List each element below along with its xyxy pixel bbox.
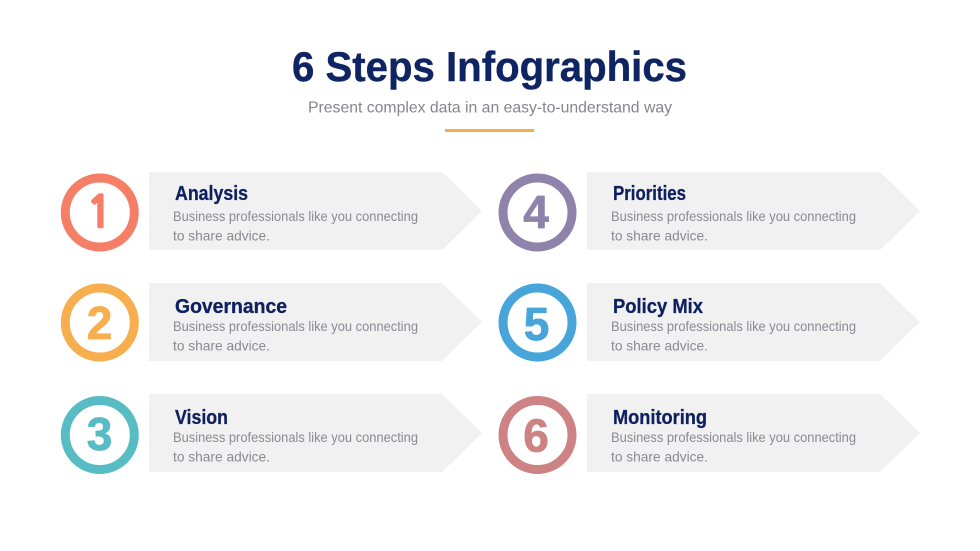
number badge 4 [503, 178, 572, 247]
description 5: to share advice. [611, 338, 708, 354]
heading 1: Analysis [175, 183, 248, 205]
title: 6 Steps Infographics [292, 43, 687, 90]
description 1: to share advice. [173, 228, 270, 244]
heading 6: Monitoring [613, 407, 707, 429]
heading 2: Governance [175, 296, 287, 318]
description 3: to share advice. [173, 448, 270, 464]
step 1: Analysis [65, 172, 482, 250]
heading 4: Priorities [613, 183, 686, 205]
arrow panel 4 [587, 172, 920, 250]
number badge 6: 6 [523, 410, 549, 462]
description 2: Business professionals like you connecting [173, 318, 418, 334]
number badge 1 [65, 178, 134, 247]
description 3: Business professionals like you connecting [173, 429, 418, 445]
description 2: to share advice. [173, 338, 270, 354]
description 3 [173, 429, 418, 464]
heading 5: Policy Mix [613, 296, 703, 318]
number badge 2: 2 [87, 297, 112, 349]
number badge 6 [503, 400, 572, 470]
arrow panel 3 [149, 394, 482, 472]
description 5 [611, 318, 856, 354]
description 1: Business professionals like you connecting [173, 208, 418, 224]
heading 3: Vision [175, 407, 228, 429]
accent underline [445, 129, 534, 132]
number badge 1: 1 [86, 190, 113, 234]
number badge 5: 5 [524, 298, 549, 350]
description 6: to share advice. [611, 448, 708, 464]
description 6 [611, 429, 856, 464]
description 5: Business professionals like you connecting [611, 318, 856, 334]
step 2: Governance [65, 283, 482, 361]
arrow panel 2 [149, 283, 482, 361]
arrow panel 5 [587, 283, 920, 361]
description 6: Business professionals like you connecting [611, 429, 856, 445]
step 5: Policy Mix [503, 283, 920, 361]
description 4: Business professionals like you connecting [611, 208, 856, 224]
arrow panel 6 [587, 394, 920, 472]
step 4: Priorities [503, 172, 920, 250]
number badge 2 [65, 288, 134, 357]
subtitle: Present complex data in an easy-to-understand way [308, 100, 672, 116]
description 1 [173, 208, 418, 244]
number badge 3 [65, 400, 134, 470]
arrow panel 1 [149, 172, 482, 250]
step 6: Monitoring [503, 394, 920, 472]
step 3: Vision [65, 394, 482, 472]
number badge 5 [503, 288, 572, 357]
description 4: to share advice. [611, 228, 708, 244]
number badge 3: 3 [87, 408, 112, 460]
description 4 [611, 208, 856, 244]
description 2 [173, 318, 418, 354]
number badge 4: 4 [523, 186, 549, 238]
